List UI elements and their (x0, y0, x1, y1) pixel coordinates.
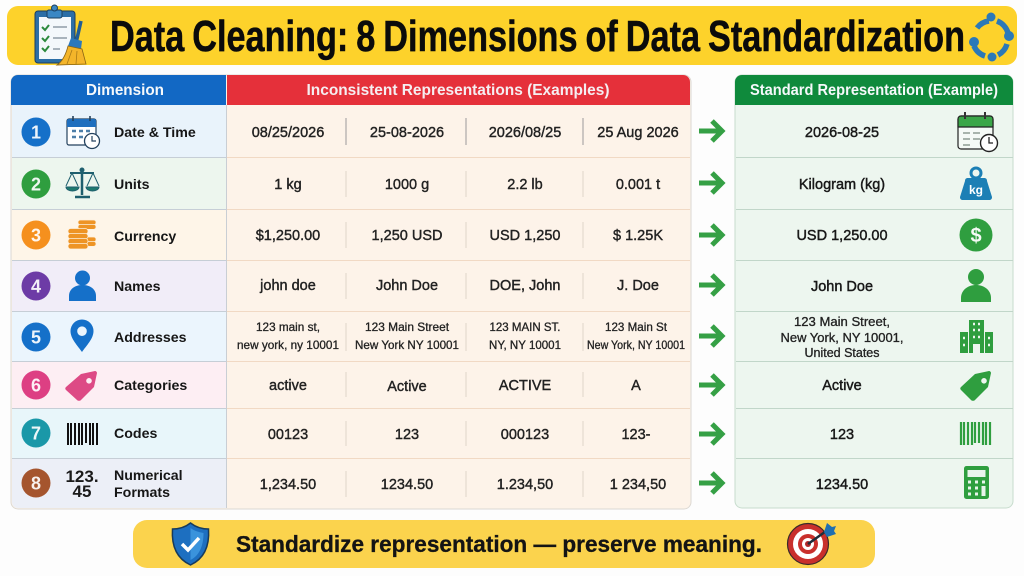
standard currency (796, 218, 992, 252)
icon: green calendar (958, 112, 998, 152)
row 1: date and time: 25 Aug 2026 (597, 125, 679, 141)
row 5: addresses: New York NY 10001 (355, 338, 459, 352)
row 1: date and time: 25-08-2026 (370, 125, 444, 141)
icon: green tag (960, 371, 991, 401)
standard currency: USD 1,250.00 (796, 228, 888, 244)
header: inconsistent representations (227, 75, 690, 105)
standard category: Active (822, 378, 862, 394)
row 2: units: 1 kg (274, 177, 302, 193)
row 6: categories: Active (387, 379, 427, 395)
row 4: names (22, 270, 659, 301)
row 2: units: 2 (31, 174, 41, 194)
row 5: addresses: New York, NY 10001 (587, 338, 685, 352)
panel: dimension table (11, 75, 691, 509)
icon: building (960, 320, 993, 353)
standard code (830, 422, 990, 445)
row 1: date and time (22, 116, 679, 148)
standard unit: Kilogram (kg) (799, 177, 885, 193)
row 3: currency (22, 220, 663, 250)
standard address (780, 315, 993, 360)
standard address: United States (804, 346, 880, 360)
row 1: date and time: 2026/08/25 (489, 125, 561, 141)
row 2: units (22, 168, 660, 198)
row 6: categories: Categories (114, 378, 187, 394)
icon: number sample: 45 (73, 482, 91, 501)
row 3: currency: Currency (114, 229, 176, 245)
row 1: date and time: Date & Time (114, 125, 196, 141)
row 3: currency: $ 1.25K (613, 228, 663, 244)
row 5: addresses: 123 Main St (605, 320, 668, 334)
row 5: addresses: 5 (31, 328, 41, 348)
icon: calculator (964, 466, 989, 499)
icon: kg weight (960, 168, 992, 200)
icon: target and dart (788, 523, 836, 564)
row 4: names: 4 (31, 276, 41, 296)
row 2: units: 1000 g (385, 177, 429, 193)
row 6: categories: A (631, 378, 641, 394)
row backgrounds (12, 105, 690, 508)
row 4: names: J. Doe (617, 278, 659, 294)
icon: green barcode (961, 422, 990, 445)
header: inconsistent representations: Inconsistent Representations (Examples) (306, 82, 610, 99)
header: standard representation: Standard Representation (Example) (750, 82, 998, 99)
icon: dollar circle (960, 218, 992, 252)
icon: number sample (65, 467, 99, 501)
row 3: currency: 1,250 USD (372, 228, 442, 244)
icon: dollar circle: $ (970, 225, 982, 247)
icon: ring of arrows (969, 12, 1014, 62)
standard address: New York, NY 10001, (780, 331, 904, 345)
standard name (811, 269, 991, 302)
row 5: addresses: NY, NY 10001 (489, 338, 561, 352)
row 7: codes: 123 (395, 427, 419, 443)
standard number: 1234.50 (816, 477, 868, 493)
icon: kg weight: kg (969, 183, 983, 197)
icon: number sample: 123. (65, 467, 99, 486)
row 4: names: Names (114, 279, 161, 295)
row 2: units: 0.001 t (616, 177, 660, 193)
row 7: codes: 123- (621, 427, 651, 443)
header: standard representation (735, 75, 1013, 105)
callout banner (133, 520, 875, 568)
row 5: addresses: Addresses (114, 330, 187, 346)
row 8: numerical formats (22, 467, 666, 501)
header: dimension (11, 75, 226, 105)
icon: person (69, 270, 96, 301)
row 7: codes (22, 418, 651, 448)
icon: balance scale (66, 168, 99, 197)
standard date (805, 112, 998, 152)
icon: clipboard and broom (35, 5, 86, 65)
row 6: categories: active (269, 378, 307, 394)
row 5: addresses: new york, ny 10001 (237, 338, 339, 352)
row 1: date and time: 1 (31, 122, 41, 142)
row 2: units: 2.2 lb (507, 177, 543, 193)
row 5: addresses: 123 MAIN ST. (490, 320, 560, 334)
row 8: numerical formats: 1.234,50 (497, 477, 553, 493)
row 4: names: DOE, John (490, 278, 560, 294)
row 3: currency: 3 (31, 226, 41, 246)
row 7: codes: 7 (31, 424, 41, 444)
row 6: categories: 6 (31, 376, 41, 396)
standard name: John Doe (811, 279, 873, 295)
standard category (822, 371, 991, 401)
row 4: names: john doe (259, 278, 316, 294)
panel: standard representation (735, 75, 1013, 508)
row 7: codes: Codes (114, 426, 157, 442)
row 8: numerical formats: 1 234,50 (610, 477, 666, 493)
header: dimension: Dimension (86, 82, 164, 99)
row 7: codes: 000123 (501, 427, 549, 443)
row 8: numerical formats: 8 (31, 474, 41, 494)
callout text: Standardize representation — preserve meaning. (236, 531, 762, 557)
row 8: numerical formats: Formats (114, 485, 170, 501)
icon: green person (961, 269, 991, 302)
standard date: 2026-08-25 (805, 125, 879, 141)
row 3: currency: USD 1,250 (490, 228, 560, 244)
row 6: categories (22, 370, 641, 401)
icon: barcode (68, 423, 97, 445)
row 8: numerical formats: 1234.50 (381, 477, 433, 493)
row 1: date and time: 08/25/2026 (252, 125, 324, 141)
title banner (7, 5, 1017, 65)
row 7: codes: 00123 (268, 427, 308, 443)
standard number (816, 466, 989, 499)
arrows (699, 121, 722, 493)
icon: coins (68, 220, 96, 249)
row 3: currency: $1,250.00 (256, 228, 320, 244)
standard unit (799, 168, 992, 200)
row 5: addresses: 123 Main Street (365, 320, 450, 334)
row 4: names: John Doe (376, 278, 438, 294)
icon: map pin (70, 320, 94, 352)
icon: shield (172, 523, 209, 565)
row 8: numerical formats: 1,234.50 (260, 477, 316, 493)
row 2: units: Units (114, 177, 150, 193)
standard code: 123 (830, 427, 854, 443)
row 8: numerical formats: Numerical (114, 468, 183, 484)
row 6: categories: ACTIVE (499, 378, 552, 394)
row 5: addresses (22, 320, 685, 352)
icon: calendar (67, 116, 100, 148)
standard address: 123 Main Street, (794, 315, 890, 329)
icon: tag (65, 371, 97, 401)
row 5: addresses: 123 main st, (256, 320, 320, 334)
